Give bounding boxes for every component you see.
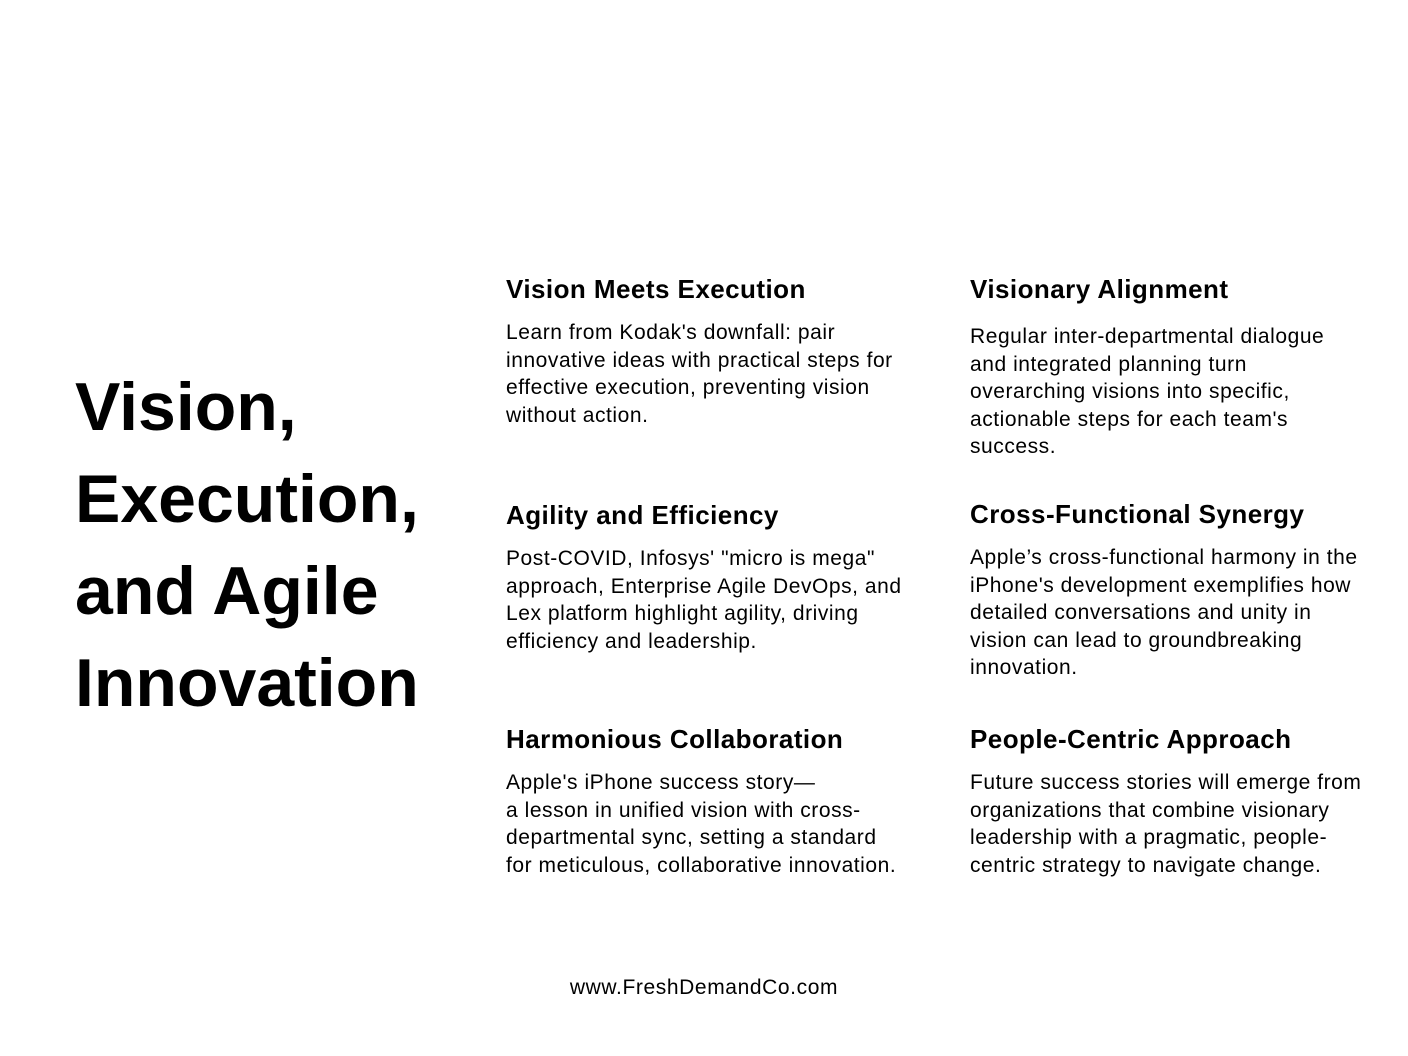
body: iPhone's development exemplifies how [970, 574, 1351, 596]
body [506, 321, 893, 426]
body: actionable steps for each team's [970, 408, 1288, 430]
heading: People-Centric Approach [970, 724, 1291, 754]
title: Vision, [75, 369, 297, 445]
body: Lex platform highlight agility, driving [506, 602, 859, 625]
body [970, 325, 1324, 458]
body [970, 771, 1361, 876]
block: agility and efficiency [506, 500, 902, 652]
block: vision meets execution [506, 274, 893, 426]
title [75, 369, 419, 721]
block: visionary alignment [970, 274, 1324, 458]
body: detailed conversations and unity in [970, 601, 1311, 624]
body: success. [970, 435, 1056, 458]
body: efficiency and leadership. [506, 630, 757, 652]
heading: Agility and Efficiency [506, 500, 779, 530]
body: Future success stories will emerge from [970, 771, 1361, 794]
body: without action. [506, 404, 648, 426]
body: Apple’s cross-functional harmony in the [970, 546, 1358, 569]
body [506, 771, 896, 876]
body: organizations that combine visionary [970, 798, 1329, 822]
body: overarching visions into specific, [970, 380, 1290, 403]
body: approach, Enterprise Agile DevOps, and [506, 574, 902, 598]
block: people-centric approach [970, 724, 1361, 876]
body: vision can lead to groundbreaking [970, 628, 1302, 652]
body: Apple's iPhone success story— [506, 771, 815, 794]
body: departmental sync, setting a standard [506, 826, 877, 849]
title: and Agile [75, 553, 379, 629]
body: a lesson in unified vision with cross- [506, 798, 861, 822]
title: Execution, [75, 461, 419, 537]
body: centric strategy to navigate change. [970, 854, 1321, 876]
body: Post-COVID, Infosys' "micro is mega" [506, 547, 875, 570]
heading: Vision Meets Execution [506, 274, 806, 304]
body [970, 546, 1358, 679]
heading: Visionary Alignment [970, 274, 1228, 304]
footer url: www.FreshDemandCo.com [570, 976, 838, 999]
body: effective execution, preventing vision [506, 376, 870, 399]
body: innovation. [970, 656, 1078, 679]
body [506, 547, 902, 652]
body: for meticulous, collaborative innovation. [506, 854, 896, 876]
body: Learn from Kodak's downfall: pair [506, 321, 835, 344]
block: harmonious collaboration [506, 724, 896, 876]
body: and integrated planning turn [970, 352, 1247, 376]
heading: Harmonious Collaboration [506, 724, 843, 754]
heading: Cross-Functional Synergy [970, 499, 1304, 529]
body: leadership with a pragmatic, people- [970, 826, 1327, 849]
title: Innovation [75, 645, 419, 721]
block: cross-functional synergy [970, 499, 1358, 679]
body: Regular inter-departmental dialogue [970, 325, 1324, 348]
body: innovative ideas with practical steps for [506, 348, 893, 372]
